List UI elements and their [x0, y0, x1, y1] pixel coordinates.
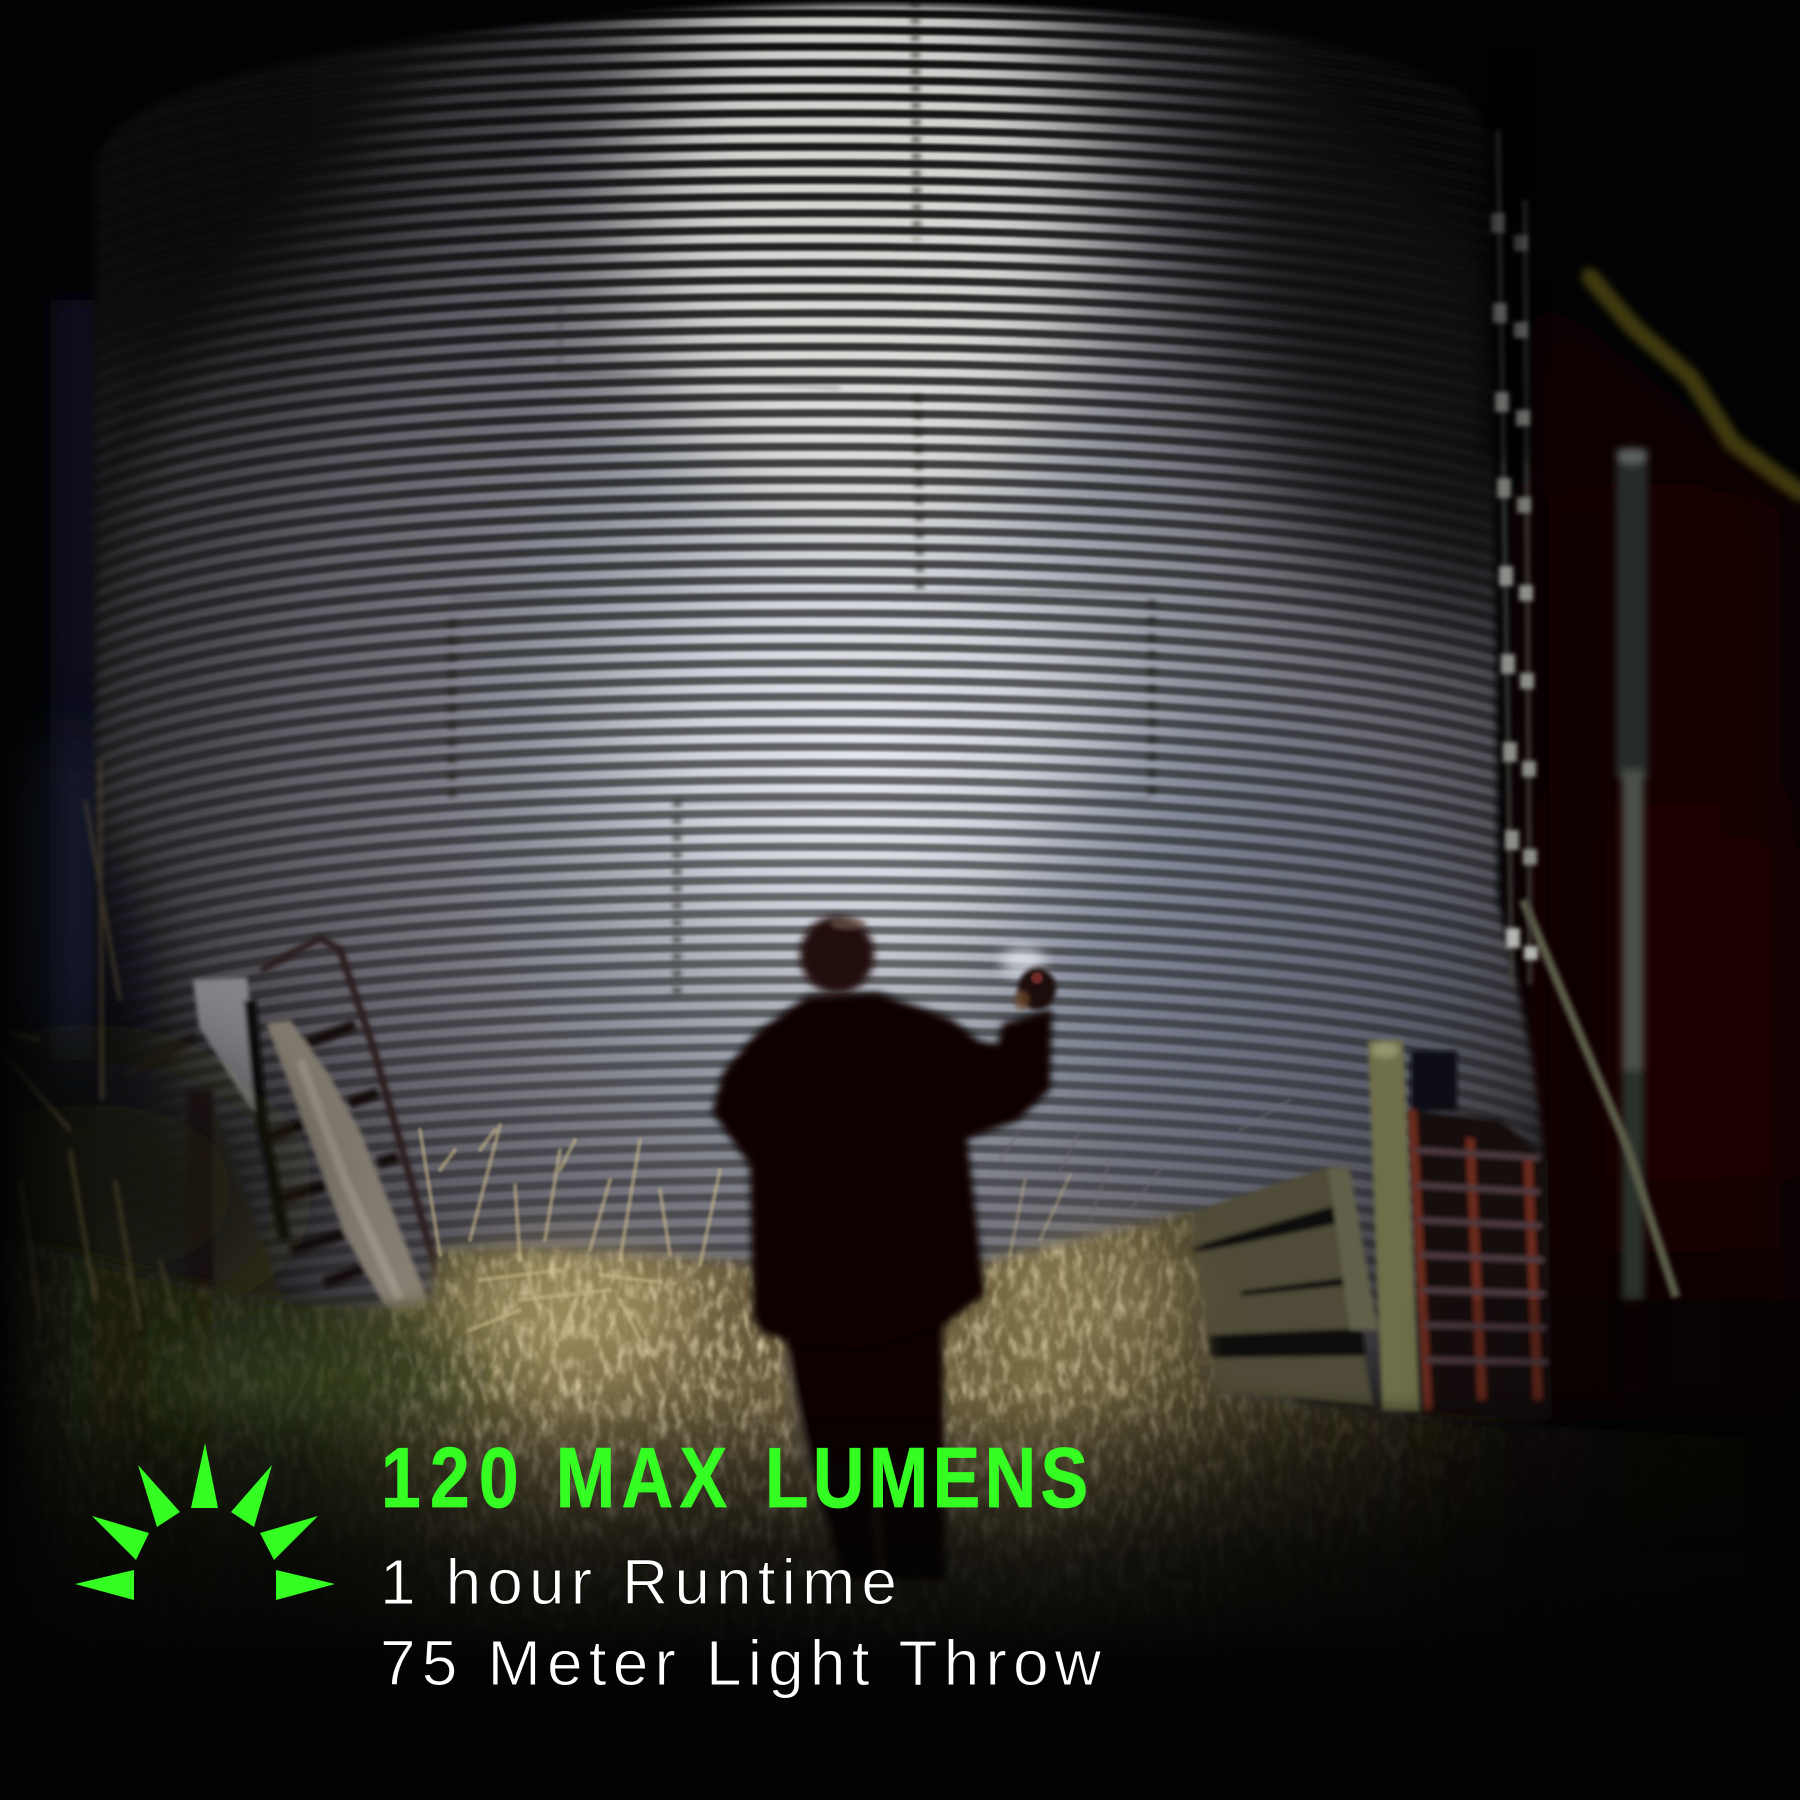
icon: green light burst	[75, 1443, 335, 1600]
right fence	[1179, 1040, 1420, 1412]
legs	[778, 1310, 945, 1580]
diagonal brace	[1523, 900, 1676, 1297]
text: light throw: 75 Meter Light Throw	[380, 1627, 1102, 1699]
gate right shadow	[250, 1000, 285, 1240]
background: red barn wall at right	[1530, 280, 1800, 1420]
left gate, posts and strut	[124, 938, 440, 1330]
faint horizontal panel seams	[450, 300, 1150, 802]
fence upright post	[1368, 1040, 1420, 1412]
silo panel seams	[452, 0, 1152, 1000]
corrugation stripes	[90, 0, 1545, 1355]
drain pipe	[1616, 448, 1648, 1300]
fence boards	[1179, 1167, 1374, 1409]
heading: 120 max lumens: MAX	[556, 1430, 760, 1525]
silo ladder with bolts	[1480, 40, 1540, 987]
heading: 120 max lumens: 120	[381, 1430, 557, 1525]
gate rungs	[270, 1025, 398, 1283]
text: runtime: 1 hour Runtime	[380, 1546, 897, 1618]
left weed shadow	[0, 1060, 280, 1320]
dark upright	[187, 1090, 213, 1305]
person silhouette raising a flashlight	[712, 916, 1056, 1580]
fence gaps	[1191, 1205, 1374, 1410]
dark olive post shadow	[207, 1087, 286, 1310]
heading: 120 max lumens: LUMENS	[765, 1430, 1093, 1525]
back fence post	[193, 977, 261, 1120]
vertical beam of light on silo	[630, 0, 1090, 560]
grass wisps	[420, 1100, 1290, 1340]
left weeds	[0, 760, 175, 1330]
fence vertical board	[1328, 1167, 1378, 1330]
head	[800, 916, 874, 994]
coat	[712, 992, 1052, 1349]
grass texture	[50, 1214, 1454, 1596]
silo body	[93, 0, 1546, 1416]
raised fist with flashlight	[1018, 968, 1056, 1010]
front wooden post	[266, 1020, 431, 1330]
barn roof edge in dim yellow	[1590, 277, 1800, 492]
ground and grass	[17, 760, 1588, 1633]
flashlight glow	[1001, 947, 1045, 977]
strut behind gate	[124, 1037, 195, 1077]
gate frame	[261, 938, 440, 1283]
red pallet leaning against silo	[1407, 1051, 1552, 1419]
gold grass highlights	[440, 1250, 700, 1370]
